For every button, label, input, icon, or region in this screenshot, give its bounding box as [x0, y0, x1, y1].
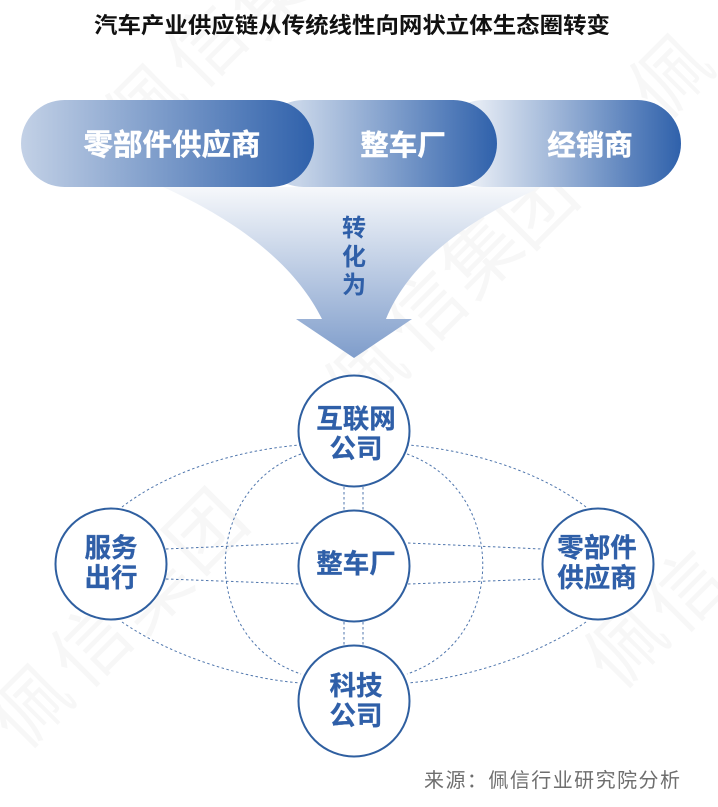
node: automaker — [298, 510, 410, 622]
node: tech companies: 公司 — [330, 701, 382, 731]
watermark: 佩 — [570, 590, 684, 704]
node: automaker: 整车厂 — [316, 549, 396, 579]
watermark: 信 — [35, 590, 149, 704]
network dashed links — [122, 445, 586, 683]
node: parts supplier — [542, 508, 654, 620]
arrow label — [342, 215, 366, 299]
watermark: 团 — [150, 475, 264, 589]
node: parts supplier: 供应商 — [557, 563, 637, 593]
node: internet companies — [298, 376, 410, 486]
pill: parts supplier: 零部件供应商 — [83, 129, 261, 162]
watermark: 信 — [370, 255, 484, 369]
title: 汽车产业供应链从传统线性向网状立体生态圈转变 — [94, 13, 610, 38]
node: mobility services — [56, 508, 166, 620]
node: tech companies — [298, 646, 410, 756]
arrow: transformation — [163, 187, 535, 358]
watermark: 团 — [480, 150, 594, 264]
node: internet companies: 互联网 — [316, 404, 396, 434]
pill: distributor — [440, 100, 681, 187]
node: tech companies: 科技 — [330, 671, 383, 701]
linear chain pills — [21, 100, 681, 187]
watermark: 集 — [95, 535, 209, 649]
source note: 来源：佩信行业研究院分析 — [424, 769, 680, 792]
pill: automaker — [260, 100, 497, 187]
node: mobility services: 出行 — [84, 563, 138, 593]
watermark: 集 — [425, 200, 539, 314]
watermark: 佩 — [90, 50, 204, 164]
arrow label: 转 — [342, 215, 366, 242]
pill: parts supplier — [21, 100, 314, 187]
pill: distributor: 经销商 — [547, 130, 633, 162]
node: mobility services: 服务 — [84, 533, 138, 563]
watermark: 佩 — [310, 320, 424, 434]
node: internet companies: 公司 — [330, 434, 382, 464]
node: parts supplier: 零部件 — [557, 533, 637, 563]
pill: automaker: 整车厂 — [360, 130, 446, 162]
arrow label: 化 — [342, 244, 366, 271]
arrow label: 为 — [342, 272, 366, 299]
